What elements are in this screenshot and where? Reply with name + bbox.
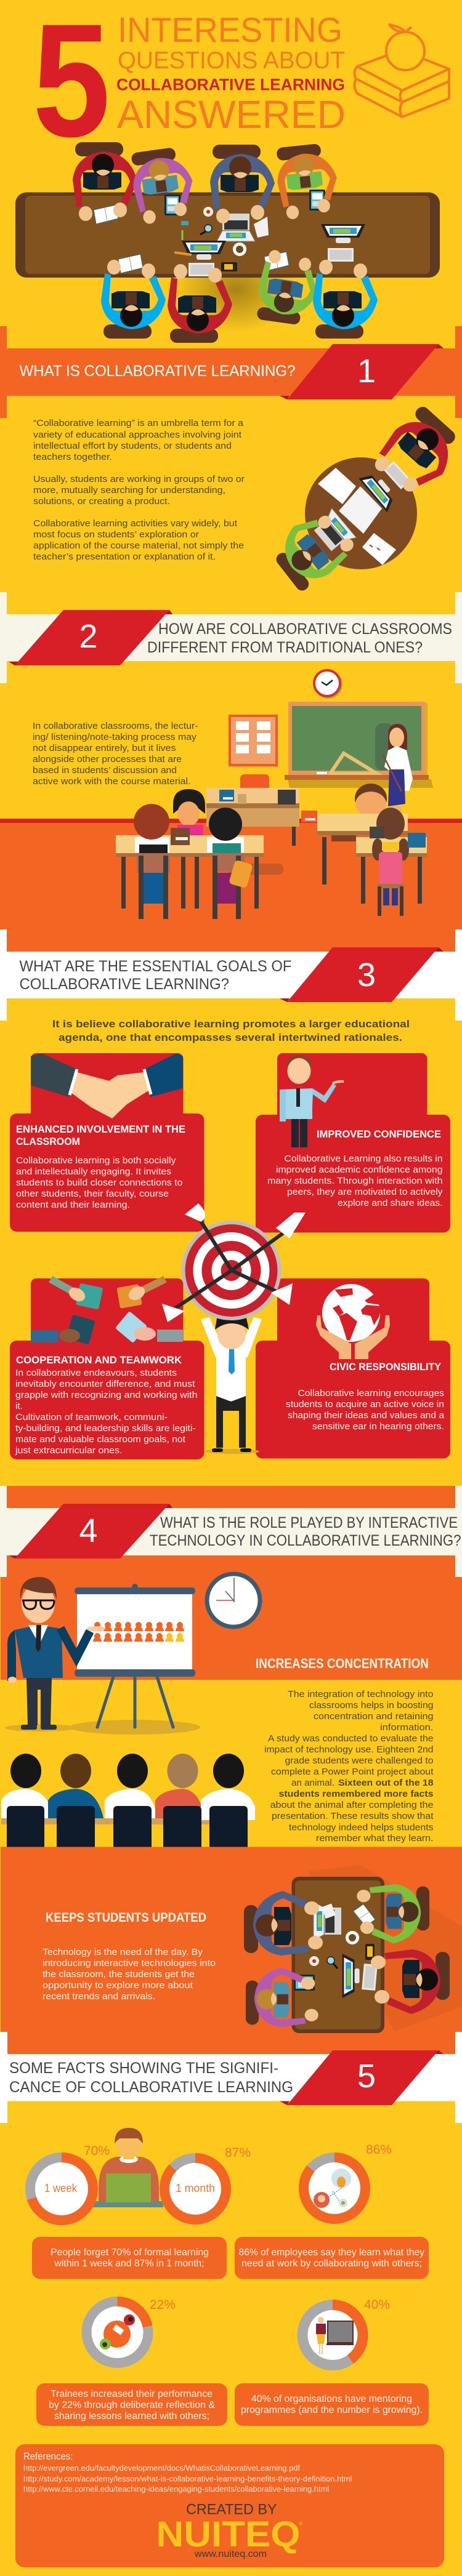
- desk objects: [294, 1902, 378, 1998]
- target: [181, 1221, 281, 1320]
- student with curly hair: [207, 808, 253, 919]
- text: what is collaborative learning: [33, 418, 245, 562]
- chart: 40 percent donut: [302, 2298, 390, 2365]
- illustration: presentation board: [5, 1584, 200, 1735]
- panel: cooperation and teamwork: just extracurricular ones.: [15, 1445, 122, 1456]
- fact box: mentoring: 40% of organisations have mentoring: [251, 2394, 412, 2404]
- panel: cooperation and teamwork: ty-building, and leadership skills are legiti-: [15, 1423, 196, 1434]
- fact box: employees: [235, 2237, 429, 2279]
- chart: 70 percent donut: 70%: [84, 2144, 110, 2158]
- text: increases concentration: Sixteen out of the 18: [338, 1778, 434, 1788]
- icon: presenting man: [280, 1055, 344, 1147]
- panel: enhanced involvement: content and their learning.: [16, 1200, 130, 1210]
- panel: cooperation and teamwork: it.: [15, 1401, 23, 1411]
- chart: 86 percent donut: 86%: [366, 2143, 392, 2157]
- chart: 22 percent donut: [86, 2298, 176, 2363]
- text: what is collaborative learning: intellectual effort by students, or students and: [33, 441, 232, 451]
- text: what is collaborative learning: Usually, students are working in groups of two or: [33, 474, 245, 484]
- references: References:: [23, 2450, 73, 2462]
- section 4 banner: [0, 1486, 462, 1680]
- section 2 banner: [0, 592, 462, 683]
- panel: keeps students updated: [1, 1847, 462, 2054]
- table: [15, 192, 440, 278]
- panel: cooperation and teamwork: grapple with recognizing and working with: [15, 1390, 197, 1400]
- text: increases concentration: classrooms helps in boosting: [309, 1700, 434, 1711]
- fact box: employees: need at work by collaborating with others;: [241, 2258, 422, 2269]
- fact box: forget: [32, 2237, 227, 2279]
- panel: enhanced involvement: other students, their faculty, course: [16, 1189, 169, 1199]
- credit: www.nuiteq.com: [194, 2549, 267, 2559]
- text: increases concentration: concentration and retaining: [314, 1711, 434, 1722]
- panel: improved confidence: IMPROVED CONFIDENCE: [317, 1128, 441, 1140]
- text: increases concentration: about the animal after completing the: [270, 1800, 434, 1810]
- section 3 banner: 3: [357, 957, 376, 993]
- section 1 banner: 1: [357, 353, 376, 390]
- text: collaborative classrooms: In collaborative classrooms, the lectur-: [33, 721, 198, 731]
- text: increases concentration: [264, 1689, 434, 1844]
- title: QUESTIONS ABOUT: [118, 47, 345, 74]
- references: http://www.cte.cornell.edu/teaching-ideas/engaging-students/collaborative-learning.html: [23, 2484, 329, 2494]
- references: [23, 2450, 352, 2494]
- panel: civic responsibility: [256, 1278, 450, 1459]
- section 5 banner: 5: [357, 2058, 376, 2095]
- panel: enhanced involvement: CLASSROOM: [16, 1136, 80, 1147]
- teacher desk: [206, 774, 317, 846]
- panel: improved confidence: Collaborative Learning also results in: [285, 1154, 442, 1164]
- fact box: trainees: sharing lessons learned with others;: [54, 2411, 209, 2422]
- student with brown hair: [134, 804, 170, 919]
- text: increases concentration: information.: [380, 1722, 434, 1733]
- section 3 banner: [0, 929, 462, 1021]
- illustration: classroom: [116, 702, 433, 919]
- title: ANSWERED: [117, 92, 346, 137]
- title: INTERESTING: [118, 10, 342, 50]
- text: collaborative classrooms: not disappear entirely, but it lives: [33, 743, 176, 753]
- notice board: [230, 716, 278, 767]
- illustration: four people around table: [244, 1865, 462, 2033]
- teacher: [383, 724, 413, 815]
- arrows: [162, 1203, 306, 1322]
- panel: enhanced involvement: students to build closer connections to: [16, 1178, 182, 1188]
- panel: improved confidence: peers, they are motivated to actively: [287, 1187, 443, 1197]
- fact box: mentoring: [235, 2383, 429, 2426]
- text: collaborative classrooms: ing/ listening/note-taking process may: [33, 732, 197, 742]
- classroom floor: [0, 819, 462, 929]
- fact box: trainees: [36, 2383, 227, 2426]
- blackboard: [285, 702, 433, 788]
- text block: the classroom, the students get the: [43, 1969, 195, 1980]
- section 5 banner: [0, 2032, 462, 2123]
- panel: enhanced involvement: and intellectually engaging. It invites: [16, 1166, 171, 1177]
- heading: WHAT ARE THE ESSENTIAL GOALS OF: [20, 958, 292, 975]
- chart: 86 percent donut: [304, 2143, 392, 2219]
- chart: 87 percent donut: 87%: [225, 2146, 251, 2160]
- heading: increases concentration: INCREASES CONCENTRATION: [256, 1656, 429, 1671]
- intro text: It is believe collaborative learning promotes a larger educational: [52, 1018, 410, 1030]
- icon: globe in hands: [316, 1284, 390, 1359]
- text: what is collaborative learning: teacher’s presentation or explanation of it.: [33, 552, 216, 562]
- girl student with pink backpack: [370, 808, 426, 916]
- icon: apple on books: [354, 25, 449, 117]
- text: what is collaborative learning: Collaborative learning activities vary widely, but: [33, 518, 238, 529]
- people seated at top: [73, 142, 341, 225]
- panel: cooperation and teamwork: Cultivation of teamwork, communi-: [15, 1412, 168, 1422]
- credit: [156, 2502, 303, 2559]
- panel: enhanced involvement: [10, 1053, 205, 1232]
- panel: improved confidence: [256, 1053, 450, 1232]
- text: collaborative classrooms: active work with the course material.: [33, 776, 191, 787]
- illustration: reading student: [93, 2128, 163, 2207]
- text: collaborative classrooms: [33, 721, 198, 787]
- section 2 banner: DIFFERENT FROM TRADITIONAL ONES?: [147, 639, 423, 656]
- text: what is collaborative learning: “Collaborative learning” is an umbrella term for a: [33, 418, 244, 428]
- text: increases concentration: impact of technology use. Eighteen 2nd: [264, 1744, 434, 1755]
- illustration: two students at round table: [265, 403, 462, 595]
- references: http://evergreen.edu/facultydevelopment/docs/WhatisCollaborativeLearning.pdf: [23, 2463, 300, 2473]
- glasses: [22, 1600, 54, 1609]
- heading: SOME FACTS SHOWING THE SIGNIFI-: [9, 2060, 278, 2077]
- icon: wall clock: [314, 670, 342, 699]
- text block: [43, 1947, 216, 2002]
- illustration: presenter: [7, 1577, 105, 1730]
- credit: ®: [299, 2521, 303, 2527]
- fact box: employees: 86% of employees say they learn what they: [239, 2247, 424, 2258]
- panel: cooperation and teamwork: mate and valuable classroom goals, not: [15, 1434, 186, 1445]
- fact box: forget: People forget 70% of formal learning: [51, 2247, 209, 2258]
- text: what is collaborative learning: most focus on students’ exploration or: [33, 529, 199, 540]
- credit: CREATED BY: [186, 2502, 277, 2518]
- chart: 22 percent donut: 22%: [150, 2298, 176, 2312]
- panel: civic responsibility: students to acquire an active voice in: [286, 1399, 444, 1410]
- illustration: person holding target: [162, 1203, 306, 1454]
- panel: civic responsibility: sensitive ear in hearing others.: [312, 1421, 444, 1432]
- people seated at bottom: [101, 249, 378, 343]
- panel: enhanced involvement: Collaborative learning is both socially: [16, 1155, 176, 1166]
- left desks and students: [116, 789, 283, 919]
- audience icons on screen: [93, 1622, 184, 1642]
- panel: cooperation and teamwork: inevitably encounter difference, and must: [15, 1379, 195, 1389]
- text: collaborative classrooms: based in students’ discussion and: [33, 765, 177, 776]
- text: increases concentration: complete a Power Point project about: [271, 1767, 434, 1777]
- section 2 banner: 2: [79, 618, 98, 655]
- text: what is collaborative learning: application of the course material, not simply the: [33, 540, 244, 551]
- intro text: agenda, one that encompasses several intertwined rationales.: [59, 1032, 402, 1043]
- panel: improved confidence: many students. Through interaction with: [267, 1176, 442, 1186]
- chart: 40 percent donut: 40%: [364, 2298, 390, 2312]
- text: increases concentration: remember what they learn.: [316, 1833, 434, 1844]
- title: [33, 0, 346, 171]
- title: COLLABORATIVE LEARNING: [116, 75, 345, 94]
- panel: improved confidence: explore and share ideas.: [338, 1198, 442, 1208]
- papers: [318, 468, 396, 565]
- text: collaborative classrooms: alongside other processes that are: [33, 754, 182, 764]
- text: what is collaborative learning: variety of educational approaches involving joint: [33, 430, 242, 440]
- text: increases concentration: The integration of technology into: [288, 1689, 434, 1699]
- text: increases concentration: an animal.: [291, 1778, 334, 1788]
- desk objects: [94, 190, 365, 276]
- text: what is collaborative learning: more, mutually searching for understanding,: [33, 485, 225, 496]
- panel: cooperation and teamwork: COOPERATION AND TEAMWORK: [16, 1354, 182, 1366]
- panel: references and credits: [15, 2444, 444, 2567]
- heading: KEEPS STUDENTS UPDATED: [46, 1911, 206, 1925]
- text: increases concentration: grade students were challenged to: [285, 1755, 434, 1766]
- chart: 87 percent donut: [164, 2146, 251, 2220]
- text: increases concentration: A study was conducted to evaluate the: [268, 1733, 434, 1744]
- references: http://study.com/academy/lesson/what-is-collaborative-learning-benefits-theory-definition.html: [23, 2474, 352, 2483]
- fact box: trainees: by 22% through deliberate reflection &: [49, 2400, 215, 2410]
- section 5 banner: CANCE OF COLLABORATIVE LEARNING: [9, 2079, 293, 2096]
- illustration: team around long table: [15, 142, 440, 343]
- heading: WHAT IS COLLABORATIVE LEARNING?: [20, 363, 296, 380]
- text block: opportunity to explore more about: [43, 1980, 193, 1991]
- text block: Technology is the need of the day. By: [43, 1947, 203, 1957]
- icon: hands with puzzle pieces: [31, 1279, 183, 1344]
- chart: 87 percent donut: 1 month: [176, 2182, 215, 2194]
- panel: cooperation and teamwork: [10, 1278, 205, 1459]
- icon: handshake: [31, 1053, 183, 1118]
- chart: 70 percent donut: [30, 2144, 110, 2220]
- panel: civic responsibility: Collaborative learning encourages: [298, 1388, 444, 1398]
- person: [201, 1310, 262, 1454]
- student with black hair: [173, 789, 205, 836]
- section 1 banner: [0, 326, 462, 418]
- panel: civic responsibility: shaping their ideas and values and a: [288, 1410, 445, 1421]
- intro text: [52, 1018, 410, 1043]
- credit: NUITEQ: [156, 2514, 301, 2554]
- text block: introducing interactive technologies into: [43, 1958, 216, 1968]
- text: what is collaborative learning: solutions, or creating a product.: [33, 496, 170, 507]
- fact box: mentoring: programmes (and the number is growing).: [241, 2405, 423, 2415]
- panel: cooperation and teamwork: In collaborative endeavours, students: [15, 1368, 177, 1378]
- illustration: audience from behind: [1, 1754, 255, 1847]
- text: increases concentration: presentation. These results show that: [272, 1811, 434, 1821]
- text block: recent trends and arrivals.: [43, 1991, 155, 2002]
- panel: improved confidence: improved academic confidence among: [276, 1165, 442, 1175]
- section 3 banner: COLLABORATIVE LEARNING?: [20, 976, 229, 993]
- panel: enhanced involvement: ENHANCED INVOLVEMENT IN THE: [16, 1123, 185, 1135]
- table shadow: [174, 246, 298, 332]
- text: increases concentration: students remembered more facts: [278, 1789, 434, 1799]
- fact box: forget: within 1 week and 87% in 1 month;: [54, 2258, 205, 2269]
- text: increases concentration: technology indeed helps students: [289, 1823, 434, 1833]
- fact box: trainees: Trainees increased their performance: [51, 2389, 213, 2399]
- section 4 banner: 4: [79, 1512, 98, 1549]
- panel: civic responsibility: CIVIC RESPONSIBILITY: [330, 1361, 442, 1373]
- right desk and boy: [317, 784, 427, 904]
- text: what is collaborative learning: teachers together.: [33, 452, 112, 462]
- chart: 70 percent donut: 1 week: [44, 2182, 78, 2194]
- icon: wall clock: [207, 1574, 260, 1627]
